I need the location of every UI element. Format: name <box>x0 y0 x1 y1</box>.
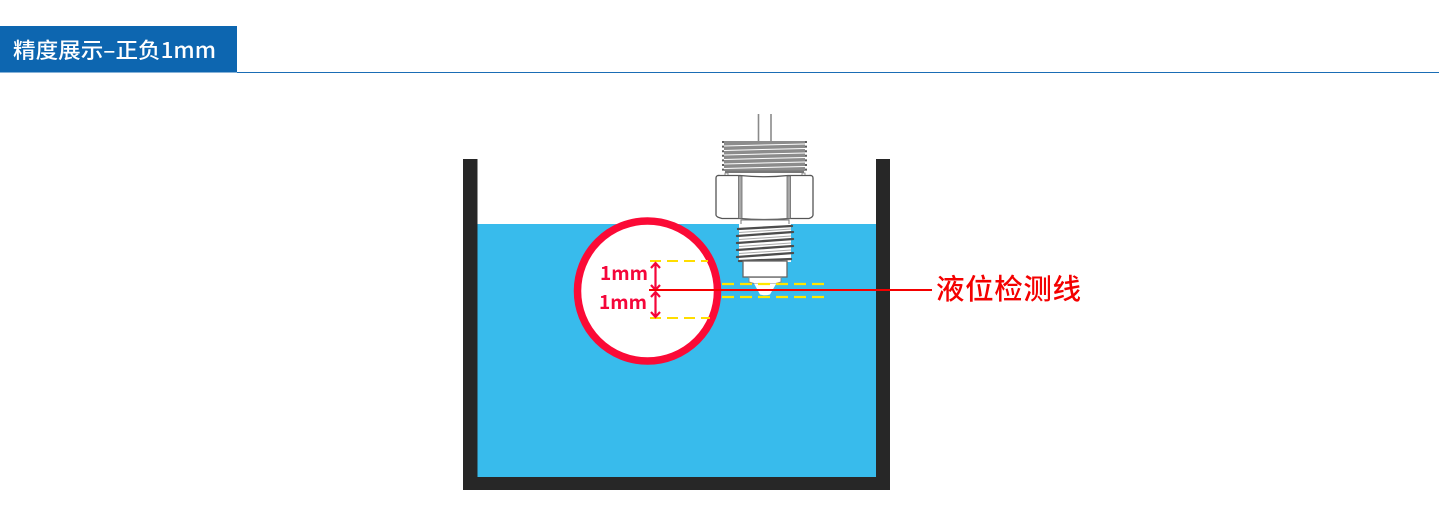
label: upper 1mm: 1mm <box>600 259 648 286</box>
icon: lower thread <box>737 224 793 262</box>
icon: neck <box>741 220 789 225</box>
icon: cable <box>758 114 771 141</box>
magnified circle <box>578 221 718 361</box>
limit dashes in circle <box>650 261 710 318</box>
icon: probe tip <box>749 278 781 295</box>
heading banner: 精度展示–正负1mm <box>13 34 216 65</box>
icon: body <box>743 261 787 277</box>
label: lower 1mm: 1mm <box>599 288 647 315</box>
detection limit dashes outside circle <box>722 284 825 297</box>
detection line <box>649 289 932 291</box>
label: liquid level detection line: 液位检测线 <box>936 267 1081 308</box>
icon: hex nut <box>716 175 813 220</box>
water <box>477 224 876 477</box>
sensor <box>716 114 813 295</box>
icon: upper thread <box>723 141 806 176</box>
arrow: lower dimension <box>651 292 660 317</box>
tank walls <box>463 159 890 490</box>
arrow: upper dimension <box>651 263 660 290</box>
heading banner <box>0 26 237 72</box>
